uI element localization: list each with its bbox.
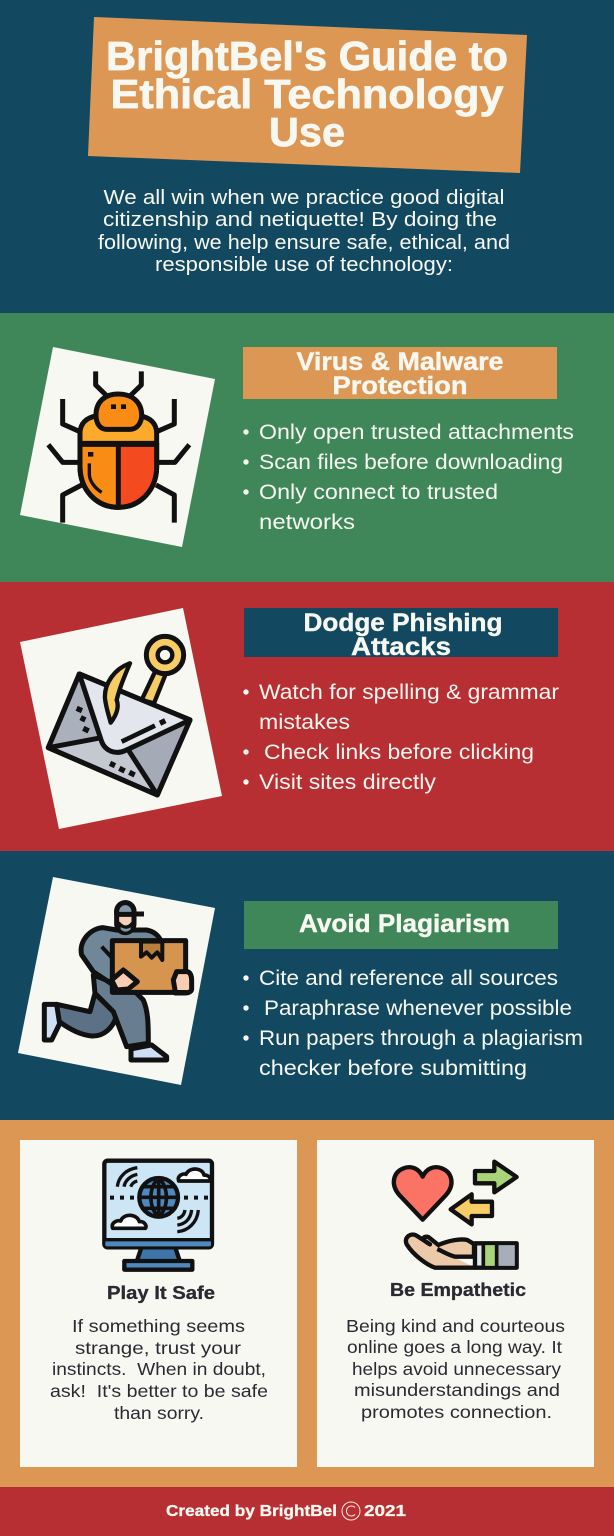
card body text: instincts. When in doubt, [52, 1359, 266, 1379]
title: Use [269, 109, 345, 155]
card body text: strange, trust your [75, 1338, 241, 1358]
bullet list: phishing tips: Check links before clicking [264, 741, 534, 764]
intro text: following, we help ensure safe, ethical, and [98, 232, 510, 254]
heading: avoid plagiarism [244, 901, 558, 949]
bullet list: plagiarism tips: Paraphrase whenever possible [264, 997, 572, 1020]
card heading: Play It Safe [107, 1282, 215, 1303]
panel: closing advice [0, 1120, 614, 1487]
title: Ethical Technology [110, 71, 504, 117]
panel: plagiarism [0, 851, 614, 1120]
bullet list: virus tips: networks [259, 511, 355, 534]
heading: virus and malware: Virus & Malware [296, 348, 504, 376]
bullet list: virus tips [243, 421, 574, 534]
intro text: responsible use of technology: [155, 254, 453, 276]
card body text [50, 1316, 268, 1423]
icon card: running man with box [18, 877, 215, 1085]
bullet list: phishing tips: Visit sites directly [259, 771, 437, 794]
bullet list: virus tips: Only open trusted attachments [259, 421, 574, 444]
card body text: helps avoid unnecessary [352, 1359, 561, 1379]
card body text: ask! It's better to be safe [50, 1381, 268, 1401]
heading: dodge phishing [244, 608, 558, 661]
bullet list: phishing tips: Watch for spelling & grammar [259, 681, 559, 704]
heading: avoid plagiarism: Avoid Plagiarism [299, 910, 510, 938]
footer: 2021 [364, 1503, 406, 1520]
heading: virus and malware [243, 347, 557, 400]
icon: monitor with globe [104, 1161, 212, 1270]
icon card: bug [20, 347, 215, 547]
bullet list: plagiarism tips [243, 967, 583, 1080]
bullet list: virus tips: Scan files before downloading [259, 451, 563, 474]
card body text: promotes connection. [361, 1402, 552, 1422]
icon: heart, arrows and hand [394, 1162, 517, 1268]
icon: copyright symbol [342, 1502, 360, 1520]
card heading: Be Empathetic [390, 1279, 526, 1300]
card: play it safe [20, 1140, 297, 1467]
bullet list: plagiarism tips: Cite and reference all sources [259, 967, 558, 990]
card body text: than sorry. [114, 1403, 204, 1423]
heading: dodge phishing: Dodge Phishing [304, 609, 502, 637]
icon card: hooked envelope [20, 608, 222, 829]
heading: virus and malware: Protection [332, 372, 468, 400]
intro text [98, 187, 510, 276]
bullet list: phishing tips [243, 681, 559, 794]
heading: dodge phishing: Attacks [351, 633, 451, 661]
card body text: online goes a long way. It [347, 1337, 562, 1357]
footer [0, 1487, 614, 1536]
title [88, 17, 527, 173]
footer: Created by BrightBel [166, 1503, 337, 1520]
card body text: misunderstandings and [354, 1380, 560, 1400]
card body text [346, 1316, 565, 1422]
bullet list: plagiarism tips: checker before submitting [259, 1057, 527, 1080]
title: BrightBel's Guide to [106, 33, 508, 79]
intro text: We all win when we practice good digital [104, 187, 504, 209]
card: be empathetic [317, 1140, 594, 1467]
panel: phishing [0, 582, 614, 851]
panel: virus and malware [0, 313, 614, 582]
intro text: citizenship and netiquette! By doing the [103, 209, 497, 231]
bullet list: plagiarism tips: Run papers through a plagiarism [259, 1027, 583, 1050]
header panel [0, 0, 614, 313]
bullet list: virus tips: Only connect to trusted [259, 481, 498, 504]
card body text: Being kind and courteous [346, 1316, 565, 1336]
bullet list: phishing tips: mistakes [259, 711, 350, 734]
card body text: If something seems [72, 1316, 245, 1336]
